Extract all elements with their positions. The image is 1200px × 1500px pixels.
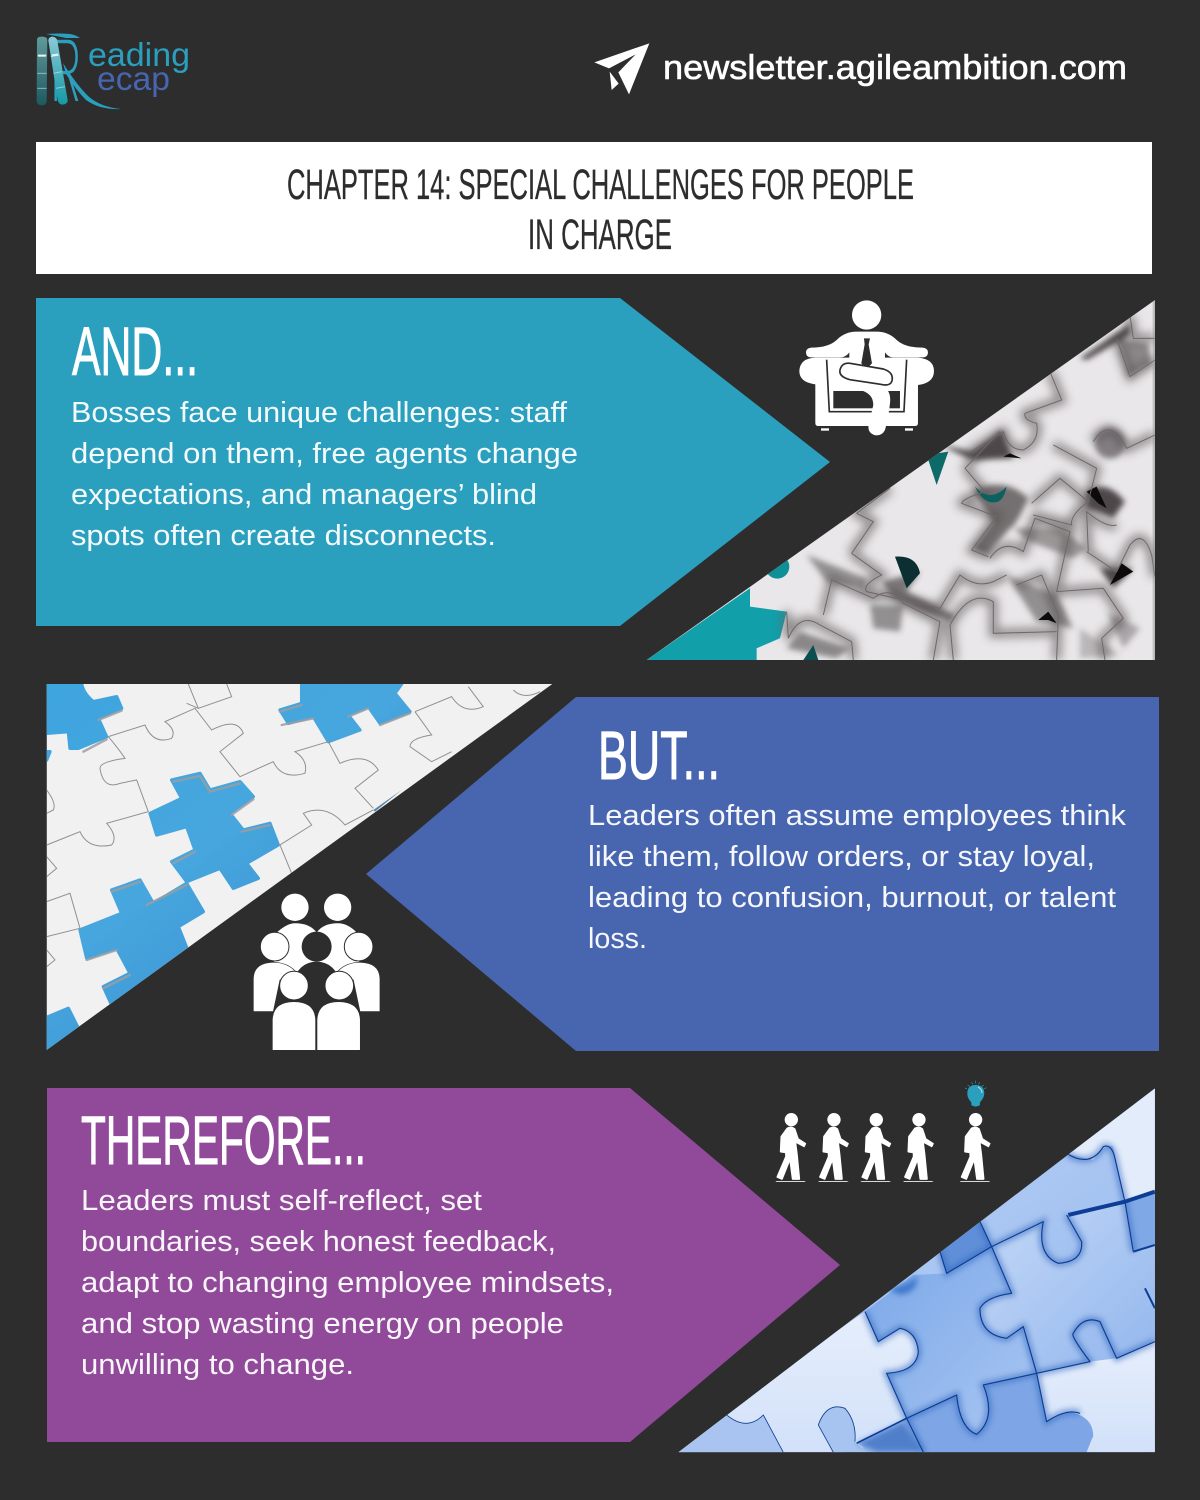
photo: blue puzzle close-up [670,1075,1160,1460]
title banner [36,142,1152,274]
text block: THEREFORE: and stop wasting energy on people [81,1308,564,1340]
heading: AND: AND... [72,313,198,390]
text block: BUT [588,800,1127,955]
back row [281,894,309,921]
front row [280,971,308,1000]
text block: AND: depend on them, free agents change [71,438,578,470]
logo letter R: R [50,19,82,123]
heading: THEREFORE: THEREFORE... [81,1102,366,1179]
lightbulb [965,1081,986,1107]
text block: BUT: like them, follow orders, or stay loyal, [588,841,1095,873]
logo swoosh [46,34,121,109]
panel: BUT [366,697,1159,1051]
icon: boss in armchair [799,300,934,435]
text block: THEREFORE: boundaries, seek honest feedback, [81,1226,556,1258]
text block: AND: expectations, and managers’ blind [71,479,537,511]
walker 2 [818,1113,849,1182]
middle row [253,962,297,1012]
website address: newsletter.agileambition.com [663,49,1127,87]
torso and arms [806,332,928,367]
text block: THEREFORE: adapt to changing employee mindsets, [81,1267,614,1299]
panel: THEREFORE [47,1088,840,1442]
arrow shape: blue [366,697,1159,1051]
icon: group of people [253,894,380,1050]
logo word: ecap: ecap [97,60,170,97]
text block: AND: Bosses face unique challenges: staff [71,397,568,429]
photo: white puzzle with blue gaps [40,680,560,1055]
heading: BUT: BUT... [598,717,720,794]
icon: walkers with lightbulb [775,1081,990,1182]
panel: AND [36,298,830,626]
logo word: eading: eading [88,36,190,73]
text block: AND: spots often create disconnects. [71,520,496,552]
walker 3 [860,1113,891,1182]
armchair [799,358,934,426]
text block: BUT: loss. [588,923,647,955]
text block: BUT: Leaders often assume employees think [588,800,1127,832]
title [287,161,914,259]
walker 4 [903,1113,934,1182]
walker 1 [775,1113,806,1182]
walker 5 [960,1113,990,1182]
logo icon: books [37,37,68,105]
arrow shape: purple [47,1088,840,1442]
arrow shape: teal [36,298,830,626]
text block: THEREFORE: unwilling to change. [81,1349,354,1381]
photo: scattered puzzle pieces [640,295,1160,665]
logo: Reading Recap [37,19,190,123]
text block: BUT: leading to confusion, burnout, or talent [588,882,1116,914]
title: IN CHARGE [528,211,672,259]
icon: paper plane [594,43,649,94]
text block: AND [71,397,578,552]
text block: THEREFORE [81,1185,614,1381]
head [852,300,881,330]
text block: THEREFORE: Leaders must self-reflect, set [81,1185,482,1217]
crossed leg [853,382,890,435]
